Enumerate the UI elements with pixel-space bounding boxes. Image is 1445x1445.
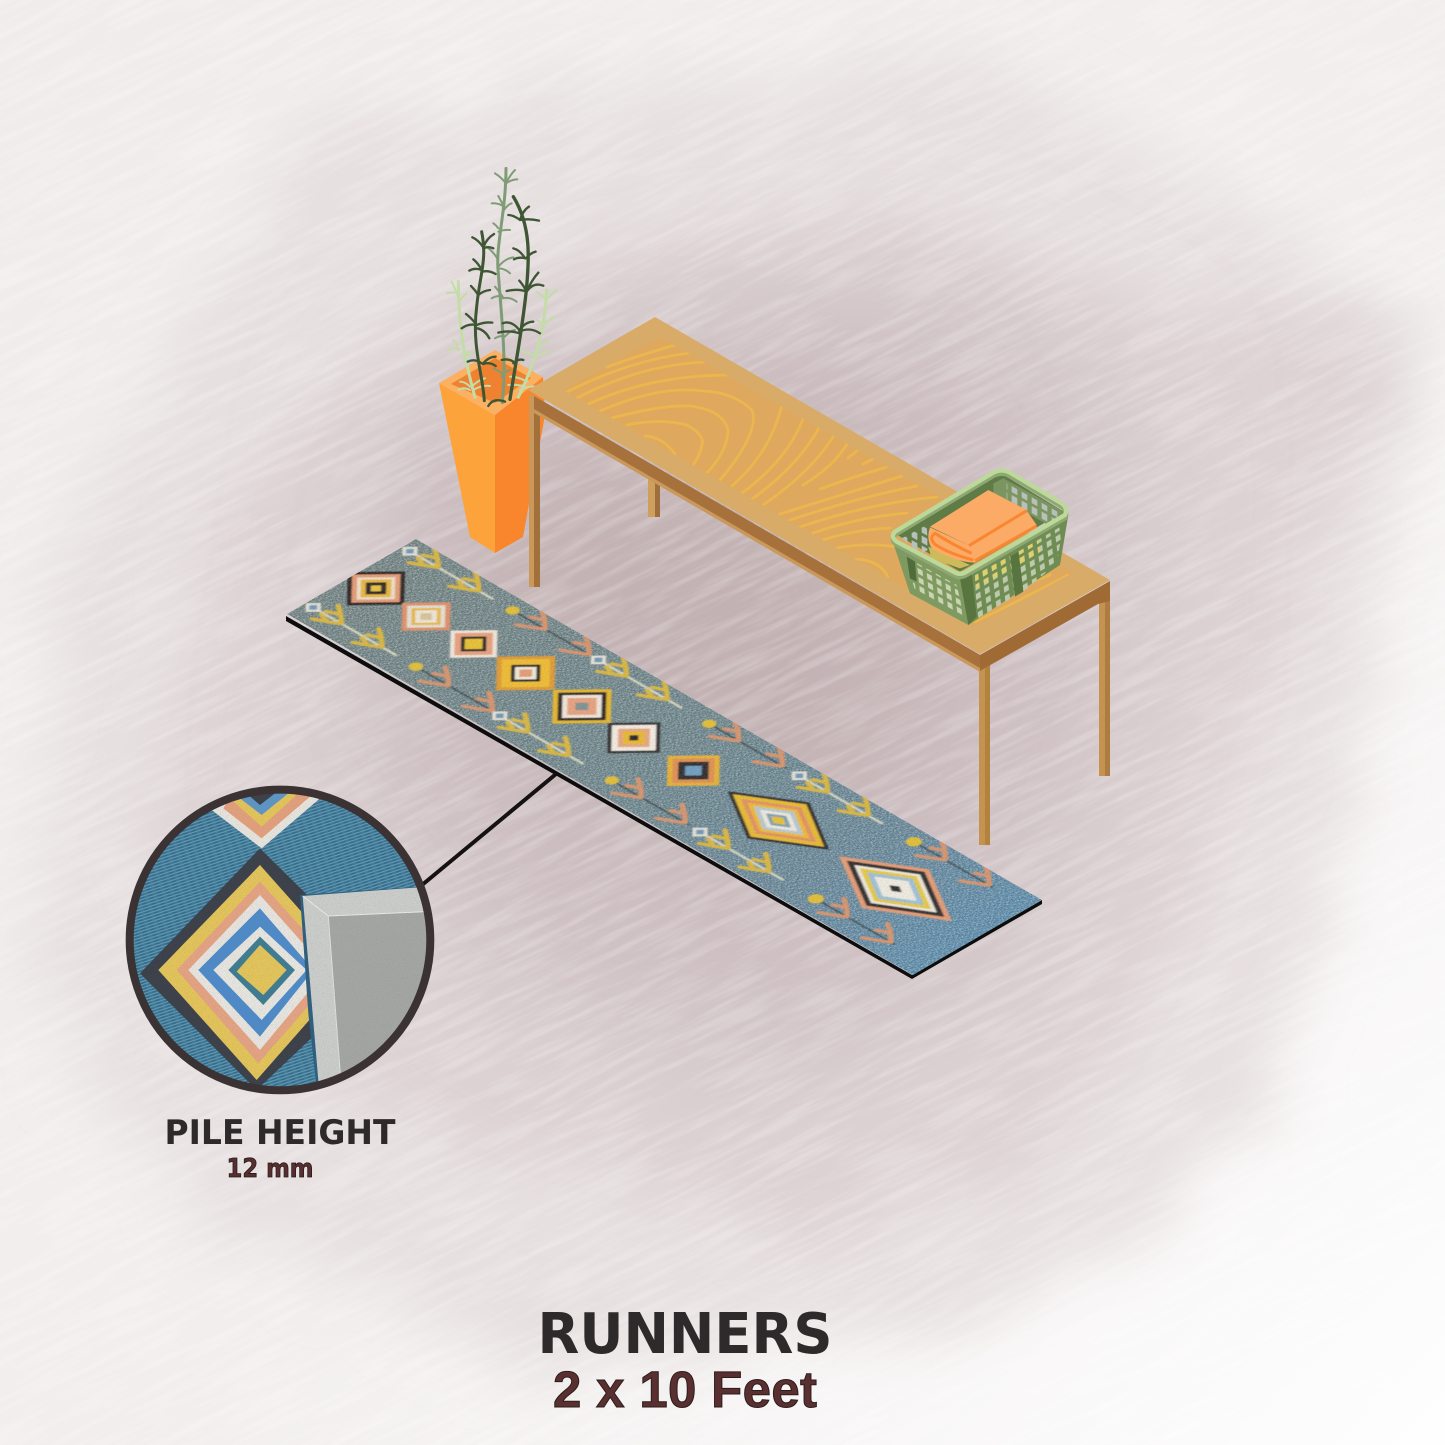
label: pile height: PILE HEIGHT xyxy=(164,1113,396,1153)
basket with towels xyxy=(892,470,1068,625)
folded rug corner xyxy=(300,887,440,1088)
table legs front xyxy=(529,395,990,845)
table top xyxy=(528,317,1110,672)
rug surface xyxy=(281,535,1043,975)
rug edge xyxy=(286,616,1042,979)
label: pile height xyxy=(164,1113,396,1184)
diamond 4 xyxy=(467,639,584,707)
diamond 9 xyxy=(806,837,985,941)
yellow dots xyxy=(404,604,925,905)
diamond 8 xyxy=(697,773,860,868)
circle border xyxy=(130,790,430,1090)
large diamond xyxy=(140,848,383,1090)
diamond 2 xyxy=(378,589,474,644)
title: runners: RUNNERS xyxy=(538,1302,832,1367)
back legs xyxy=(648,470,1110,776)
diamond 3 xyxy=(427,617,521,671)
magnifier circle: pile height detail xyxy=(120,747,440,1100)
plant xyxy=(447,168,557,406)
table xyxy=(439,168,1110,845)
plant pot xyxy=(439,350,545,553)
diamond 7 xyxy=(641,740,745,801)
towels xyxy=(928,490,1037,568)
diamond 6 xyxy=(582,708,686,768)
diamond 1 xyxy=(346,571,406,606)
callout line xyxy=(422,774,556,885)
label: pile height: 12 mm xyxy=(226,1154,314,1184)
diamond 5 xyxy=(523,673,640,740)
upper diamond tip xyxy=(212,747,320,848)
runner rug xyxy=(281,535,1043,979)
sprigs xyxy=(296,540,1007,950)
subtitle: size: 2 x 10 Feet xyxy=(553,1361,817,1418)
